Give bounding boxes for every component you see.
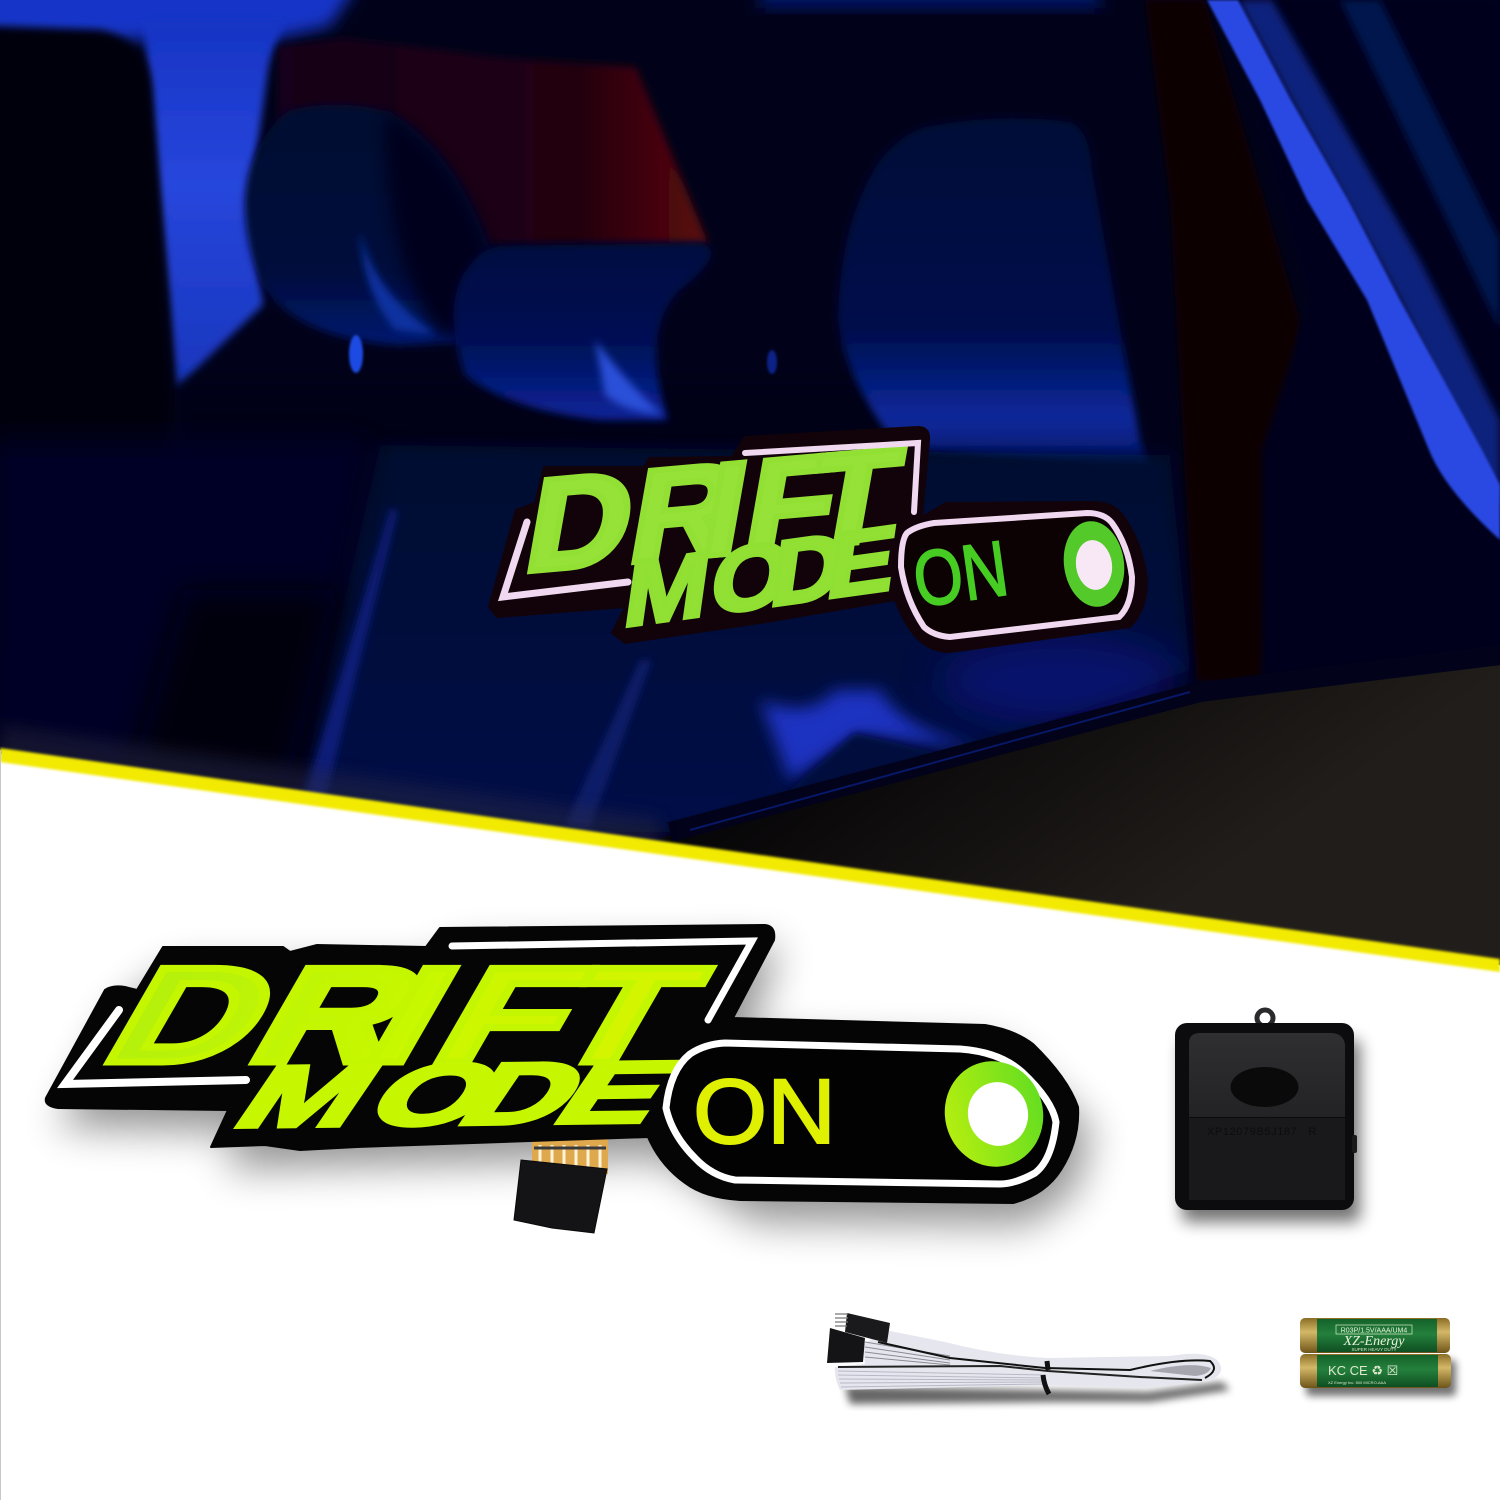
seat dark notch (795, 728, 932, 788)
battery bottom gold body (1300, 1354, 1451, 1388)
right front headrest (838, 118, 1150, 470)
battery top wrap (1317, 1319, 1437, 1352)
remote control box (1175, 1010, 1360, 1222)
battery bottom small print: XZ Energy Inc. 500 MICRO-AAA (1328, 1380, 1386, 1385)
top roof glow (0, 0, 360, 40)
remote serial text: XP12079B5J187 R (1207, 1126, 1317, 1138)
roof glow right (760, 0, 1100, 8)
sign text: DRIFT: DRIFT (80, 939, 730, 1091)
connector pins (835, 1314, 848, 1326)
left edge hairline (0, 750, 1, 1500)
remote side button (1352, 1135, 1357, 1153)
battery shadow (1306, 1360, 1456, 1396)
sign backing plate (489, 427, 1147, 652)
sign indicator ring (1058, 517, 1130, 611)
seat dark cushion shape (130, 590, 340, 780)
dark red rear wall (278, 38, 708, 243)
left seat silhouette (0, 20, 176, 438)
cable shadow (845, 1382, 1230, 1404)
battery brand text: XZ-Energy (1343, 1334, 1405, 1349)
sign text: ON: ON (693, 1061, 836, 1163)
sign indicator ring (934, 1051, 1054, 1177)
strip side tone (1238, 0, 1500, 510)
battery top label (1336, 1325, 1412, 1334)
connector top (845, 1313, 890, 1343)
cable ribs at connector (865, 1342, 950, 1365)
connector housing (514, 1160, 607, 1233)
front seat backrest (300, 445, 1190, 832)
sign indicator light (1073, 538, 1115, 592)
cable loop interior (1150, 1365, 1211, 1376)
windshield bright strip (1207, 0, 1500, 540)
haze near edge (0, 726, 662, 840)
AAA batteries (1300, 1318, 1456, 1396)
sign left bracket (503, 522, 628, 597)
center headrest (454, 243, 711, 420)
sign left bracket (65, 1010, 246, 1084)
panel: lit sign in the window (489, 420, 1147, 652)
remote upper face (1189, 1033, 1345, 1117)
door sill line (670, 655, 1500, 832)
remote body (1175, 1023, 1354, 1210)
sign text: MODE: MODE (619, 505, 903, 647)
sign pill outline (901, 513, 1132, 637)
connector bottom (827, 1328, 865, 1363)
panel: product sign on white (46, 925, 1092, 1233)
windshield far band (1340, 0, 1500, 330)
seat bright bolster (760, 690, 990, 780)
rear window pillar (143, 20, 285, 387)
battery top gold body (1300, 1318, 1450, 1353)
seat panel glow line 2 (565, 660, 652, 828)
center headrest highlight (595, 340, 662, 415)
sign pill outline (666, 1043, 1056, 1184)
rear dark band (176, 374, 193, 386)
cable tie (1043, 1361, 1049, 1394)
sign text: MODE: MODE (215, 1043, 698, 1146)
battery bottom wrap (1317, 1355, 1438, 1387)
left headrest shaded side (385, 112, 505, 340)
battery sub text: SUPER HEAVY DUTY (1351, 1347, 1397, 1352)
ribbon cable (827, 1313, 1230, 1404)
remote lanyard loop (1257, 1010, 1273, 1026)
cable ribs lower (838, 1371, 1045, 1387)
sign top bracket (452, 941, 752, 1020)
connector flex pins (532, 1138, 608, 1176)
cable body (835, 1330, 1221, 1390)
left headrest (245, 104, 505, 345)
cable dark edge upper (878, 1342, 1214, 1378)
battery top rating text: R03P/1.5V/AAA/UM4 (1341, 1328, 1407, 1334)
sign indicator light (961, 1076, 1035, 1152)
headrest post light (349, 335, 363, 373)
yellow diagonal divider (0, 748, 1500, 972)
battery bottom marks: KC CE ♻ ☒ (1328, 1363, 1398, 1378)
cable dark edge lower (838, 1366, 1202, 1380)
sign backing plate (46, 925, 1078, 1203)
window dark (1260, 330, 1302, 674)
dash lower dark (660, 664, 1500, 975)
seat right glow (940, 635, 1180, 725)
remote shadow (1182, 1040, 1360, 1222)
seat panel glow line (305, 510, 398, 800)
remote lower face (1189, 1118, 1345, 1200)
left headrest highlight (360, 230, 436, 335)
left rear seat tone (0, 432, 364, 747)
sign text: DRIFT: DRIFT (516, 420, 911, 600)
door pillar red (1145, 0, 1300, 690)
remote button oval (1230, 1067, 1298, 1107)
sign text: ON: ON (908, 524, 1013, 623)
panel: car interior night photo (0, 0, 1500, 975)
sign top bracket (745, 443, 918, 512)
door sill highlight (690, 692, 1190, 830)
sign shadow (58, 947, 1092, 1225)
post light small (767, 350, 777, 374)
